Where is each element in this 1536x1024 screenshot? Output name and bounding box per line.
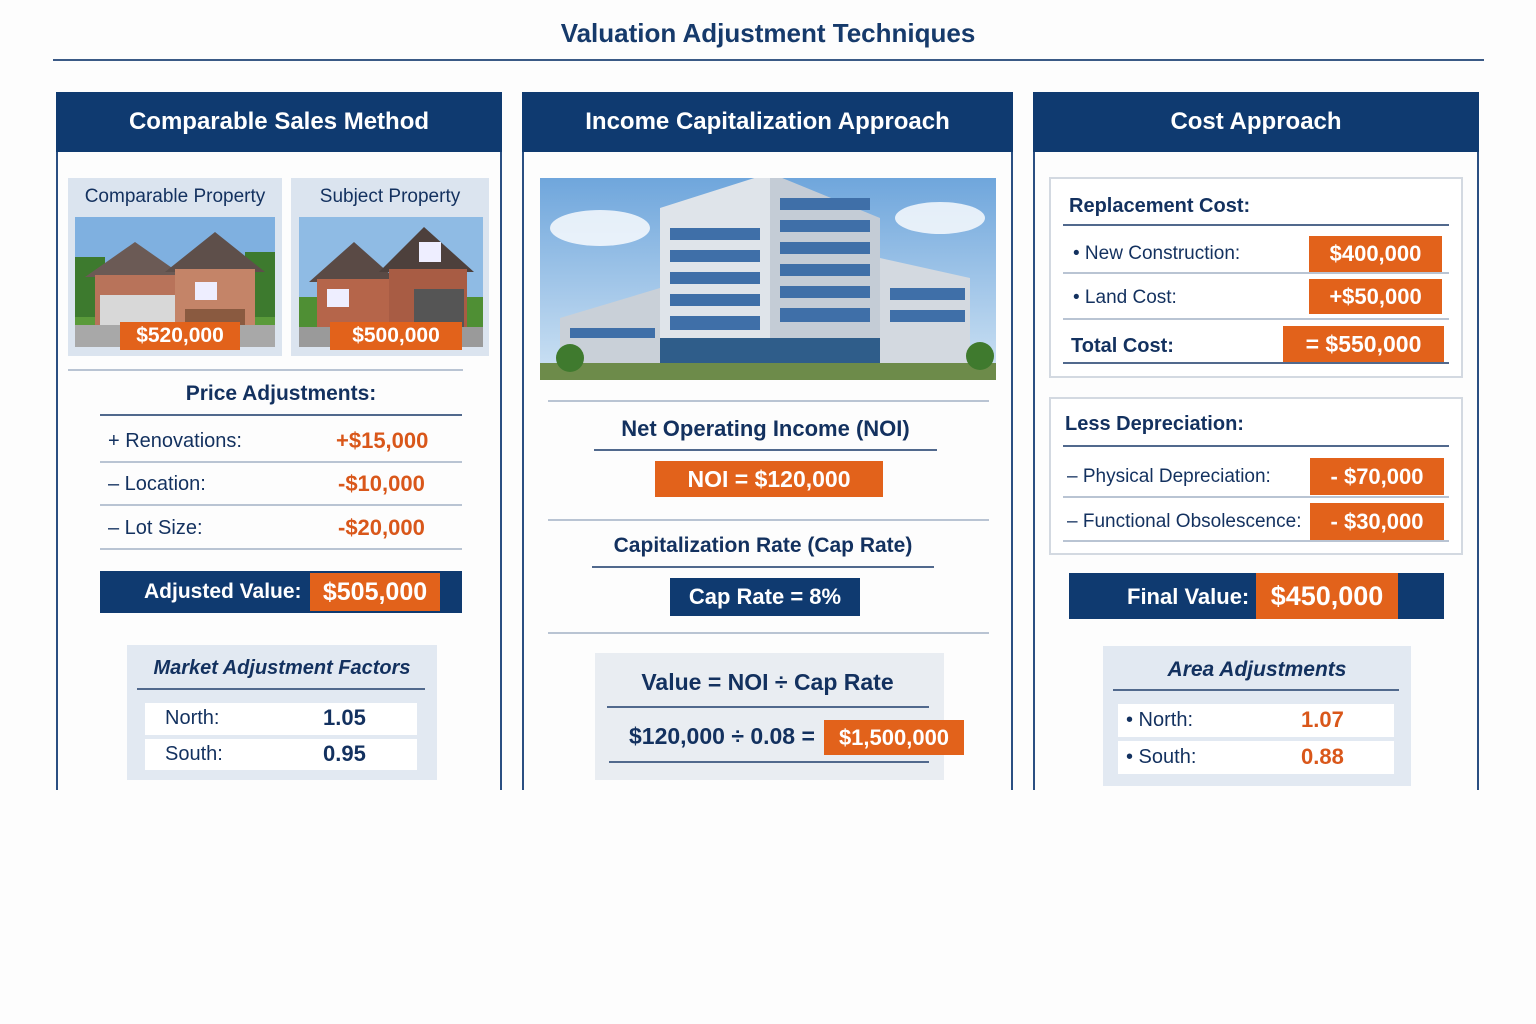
final value bar: Final Value:	[1127, 584, 1249, 609]
final value bar	[1069, 573, 1444, 619]
replacement cost box: = $550,000	[1306, 331, 1421, 357]
market adjustment factors	[127, 645, 437, 780]
heading: cost approach: Cost Approach	[1170, 108, 1342, 135]
NOI section: NOI = $120,000	[687, 466, 851, 492]
replacement cost box: +$50,000	[1329, 284, 1422, 309]
comparable property card	[68, 178, 282, 356]
area adjustments: 1.07	[1301, 707, 1344, 732]
adjusted value bar: Adjusted Value:	[144, 580, 302, 603]
price adjustments: +$15,000	[336, 428, 428, 453]
price adjustments	[100, 382, 462, 550]
formula box: $120,000 ÷ 0.08 =	[629, 723, 815, 749]
replacement cost box: $400,000	[1330, 241, 1421, 266]
panel: cost approach	[1033, 92, 1479, 790]
panel: comparable sales	[56, 92, 502, 790]
icon: house 2	[299, 217, 483, 347]
formula box: Value = NOI ÷ Cap Rate	[641, 669, 894, 695]
depreciation box: – Functional Obsolescence:	[1067, 511, 1301, 532]
price adjustments: -$10,000	[338, 471, 425, 496]
price adjustments: – Lot Size:	[108, 517, 203, 539]
heading: income capitalization: Income Capitalization Approach	[585, 108, 950, 135]
price adjustments: – Location:	[108, 473, 206, 495]
area adjustments: 0.88	[1301, 744, 1344, 769]
heading: income capitalization	[522, 92, 1013, 152]
heading: cost approach	[1033, 92, 1479, 152]
market adjustment factors: Market Adjustment Factors	[153, 657, 411, 679]
adjusted value bar: $505,000	[323, 578, 427, 606]
heading: comparable sales	[56, 92, 502, 152]
price adjustments: + Renovations:	[108, 430, 242, 452]
market adjustment factors: 1.05	[323, 705, 366, 730]
replacement cost box: • Land Cost:	[1073, 287, 1177, 308]
NOI section	[594, 416, 937, 497]
comparable property card: $520,000	[136, 324, 224, 347]
comparable property card: Comparable Property	[85, 186, 265, 207]
depreciation box: - $30,000	[1331, 509, 1423, 534]
market adjustment factors: South:	[165, 743, 223, 765]
adjusted value bar	[100, 571, 462, 613]
title: Valuation Adjustment Techniques	[561, 18, 975, 48]
replacement cost box: Replacement Cost:	[1069, 195, 1250, 217]
area adjustments: Area Adjustments	[1168, 658, 1346, 681]
area adjustments	[1103, 646, 1411, 786]
formula box	[595, 653, 944, 780]
heading: comparable sales: Comparable Sales Method	[129, 108, 429, 135]
subject property card: Subject Property	[320, 186, 460, 207]
depreciation box	[1049, 397, 1463, 555]
price adjustments: Price Adjustments:	[186, 382, 376, 405]
panel: income capitalization	[522, 92, 1013, 790]
area adjustments: • North:	[1126, 709, 1193, 731]
depreciation box: Less Depreciation:	[1065, 413, 1244, 435]
market adjustment factors: North:	[165, 707, 219, 729]
cap rate section	[592, 534, 934, 616]
icon: office building	[540, 178, 996, 380]
NOI section: Net Operating Income (NOI)	[621, 416, 910, 441]
cap rate section: Cap Rate = 8%	[689, 584, 841, 609]
area adjustments: • South:	[1126, 746, 1196, 768]
market adjustment factors: 0.95	[323, 741, 366, 766]
replacement cost box: Total Cost:	[1071, 335, 1174, 357]
depreciation box: - $70,000	[1331, 464, 1423, 489]
icon: house 1	[75, 217, 275, 347]
final value bar: $450,000	[1271, 581, 1383, 611]
formula box: $1,500,000	[839, 725, 949, 750]
cap rate section: Capitalization Rate (Cap Rate)	[614, 534, 912, 557]
subject property card: $500,000	[352, 324, 440, 347]
depreciation box: – Physical Depreciation:	[1067, 466, 1271, 487]
price adjustments: -$20,000	[338, 515, 425, 540]
replacement cost box: • New Construction:	[1073, 243, 1240, 264]
subject property card	[291, 178, 489, 356]
replacement cost box	[1049, 177, 1463, 378]
